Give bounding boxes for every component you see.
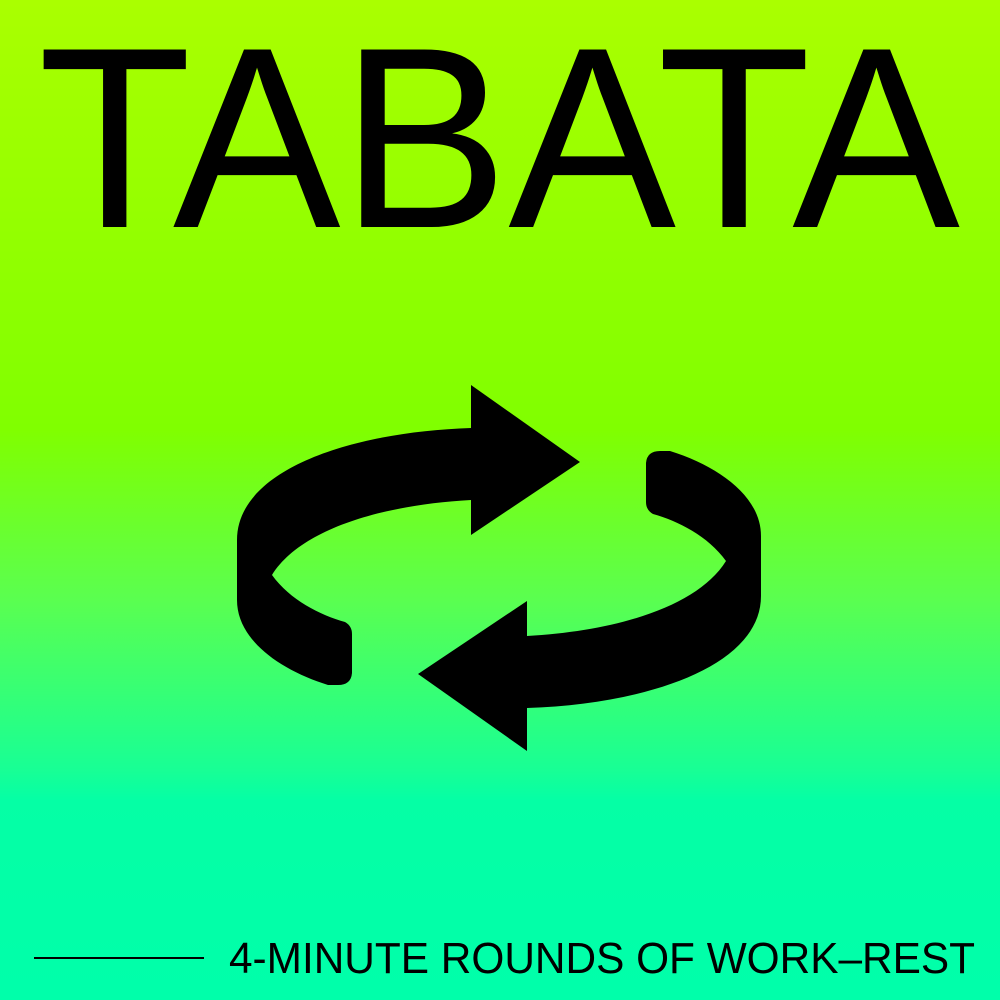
arrow: bottom left-pointing [418,451,761,751]
arrow: top right-pointing [237,385,580,685]
subtitle with rule: 4-MINUTE ROUNDS OF WORK–REST [229,934,975,983]
title: TABATA [38,0,961,282]
icon: cycle arrows [237,385,761,751]
